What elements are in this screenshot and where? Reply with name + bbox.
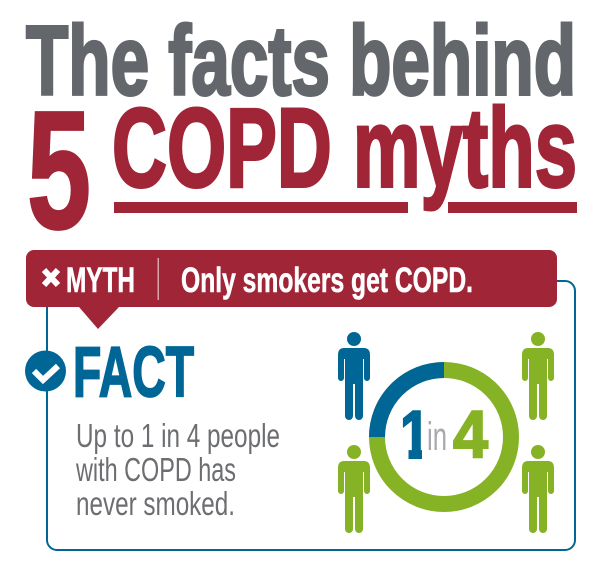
banner shape xyxy=(26,250,557,329)
title underline xyxy=(114,202,577,213)
word: in: in xyxy=(427,415,447,459)
icon: person green top right xyxy=(522,332,554,420)
fact text xyxy=(75,417,280,522)
donut blue segment xyxy=(377,370,444,437)
icon: person green bottom left xyxy=(338,445,370,533)
myth banner xyxy=(26,250,557,329)
fact text: never smoked. xyxy=(76,485,235,522)
icon: person blue top left xyxy=(338,332,370,420)
banner divider xyxy=(158,258,159,300)
title numeral: 5: 5 xyxy=(27,76,91,264)
numeral 4: 4 xyxy=(453,398,488,472)
fact heading: FACT xyxy=(73,334,194,412)
icon: check circle xyxy=(25,350,66,392)
fact text: Up to 1 in 4 people xyxy=(76,417,280,454)
donut green segment xyxy=(377,370,511,504)
numeral 1: 1 xyxy=(400,397,430,473)
fact text: with COPD has xyxy=(75,451,236,488)
myth label: MYTH xyxy=(66,261,135,300)
icon: person green bottom right xyxy=(522,445,554,533)
panel: fact box xyxy=(47,281,575,550)
title xyxy=(26,6,577,264)
icon: x mark xyxy=(44,270,58,285)
donut chart: 1 in 4 xyxy=(377,370,511,504)
myth statement: Only smokers get COPD. xyxy=(181,261,473,300)
